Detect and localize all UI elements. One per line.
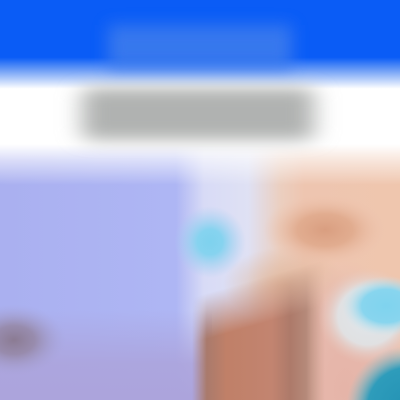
panel: photo background [0, 140, 400, 400]
photo: garment highlight [318, 268, 400, 364]
text block: blurred subtitle [82, 88, 314, 140]
photo: arm [193, 272, 322, 400]
photo: neck tone [223, 247, 347, 323]
heading: blurred title [108, 25, 292, 69]
panel: lavender card lower tint [0, 310, 212, 400]
photo: face shadow [263, 194, 387, 266]
icon: dark corner mark [0, 304, 66, 376]
photo: pink sleeve area [275, 260, 400, 400]
icon: cyan circle [174, 206, 246, 278]
photo: teal garment [346, 346, 400, 400]
photo: cyan garment [342, 276, 400, 336]
header band and white strip [0, 0, 400, 185]
